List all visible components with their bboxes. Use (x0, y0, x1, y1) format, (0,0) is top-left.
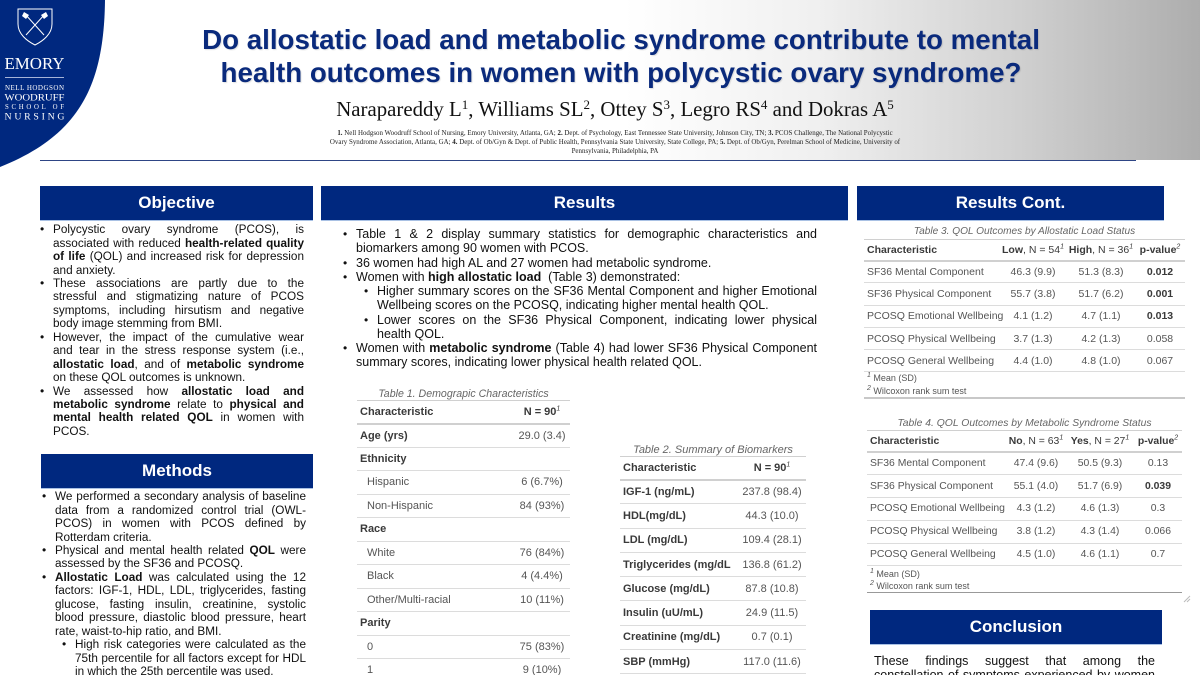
table 4 body: SF36 Physical Component (870, 481, 993, 492)
heading: Results (321, 186, 848, 221)
text: objective bullets: These associations are partly due to the (53, 277, 304, 290)
table 2 body: 136.8 (61.2) (742, 559, 802, 571)
table 2 body: 237.8 (98.4) (742, 486, 802, 498)
table 3 footnotes: 2 Wilcoxon rank sum test (867, 385, 966, 396)
table 2 body: Creatinine (mg/dL) (623, 631, 720, 643)
table 3 footnotes (867, 372, 966, 396)
heading: Objective: Objective (138, 193, 215, 212)
table 4 body: 50.5 (9.3) (1078, 458, 1122, 469)
table 4 body: No, N = 631 (1009, 434, 1063, 446)
table 4 body: 4.6 (1.3) (1081, 503, 1119, 514)
table 4 body (867, 430, 1182, 566)
table 2 body: Glucose (mg/dL) (623, 583, 710, 595)
text: methods bullets: factors: IGF-1, HDL, LDL, triglycerides, fasting (55, 584, 306, 597)
text: results bullets: Table 1 & 2 display summary statistics for demographic characteristics and (356, 227, 817, 241)
table 2 body: Triglycerides (mg/dL (623, 559, 731, 571)
table 4 body: 4.3 (1.4) (1081, 526, 1119, 537)
table 1 body: Age (yrs) (360, 430, 408, 442)
table 1 body: Hispanic (367, 476, 409, 488)
table 3 body: PCOSQ Emotional Wellbeing (867, 310, 1003, 322)
text: objective bullets: associated with reduced health-related quality (53, 237, 304, 250)
header rule (40, 160, 1136, 161)
table 1 body: 6 (6.7%) (521, 476, 563, 488)
table 2 body: SBP (mmHg) (623, 656, 690, 668)
text: results bullets: Women with high allostatic load (Table 3) demonstrated: (356, 270, 680, 284)
table 3 body: Low, N = 541 (1002, 243, 1064, 256)
text: results bullets: 36 women had high AL and 27 women had metabolic syndrome. (356, 256, 711, 270)
text: methods bullets (42, 490, 306, 675)
table 4 body: 0.7 (1151, 549, 1165, 560)
heading: Methods: Methods (142, 461, 212, 480)
table 3 body: 0.058 (1147, 333, 1173, 345)
table 4 body: 0.039 (1145, 481, 1171, 492)
table 1 body: 75 (83%) (520, 641, 564, 653)
table 2 body: N = 901 (754, 461, 790, 474)
table 4 footnotes: 1 Mean (SD) (870, 568, 920, 579)
table 3 body: 4.2 (1.3) (1081, 333, 1121, 345)
table 3 body: 3.7 (1.3) (1013, 333, 1053, 345)
table 3 body: 0.012 (1147, 266, 1173, 278)
table 3 body: 51.7 (6.2) (1079, 288, 1123, 300)
table 2 body: LDL (mg/dL) (623, 534, 688, 546)
text: conclusion (874, 654, 1155, 675)
affiliations (330, 128, 900, 155)
table 3 body: PCOSQ Physical Wellbeing (867, 333, 996, 345)
table 2 body (620, 456, 806, 674)
text: objective bullets: Polycystic ovary syndrome (PCOS), is (53, 223, 304, 236)
text: methods bullets: Physical and mental health related QOL were (55, 544, 306, 557)
table 3 body: 0.001 (1147, 288, 1173, 300)
table 4 body: 47.4 (9.6) (1014, 458, 1058, 469)
text: results bullets: health QOL. (377, 327, 444, 341)
resize handle (1184, 596, 1190, 602)
table 3 body: 46.3 (9.9) (1011, 266, 1055, 278)
table 3 body: 51.3 (8.3) (1079, 266, 1123, 278)
table 4 body: 4.5 (1.0) (1017, 549, 1055, 560)
table 3 body: 55.7 (3.8) (1011, 288, 1055, 300)
table 2 body: 109.4 (28.1) (742, 534, 802, 546)
heading: Results Cont. (857, 186, 1164, 221)
affiliations: Pennsylvania, Philadelphia, PA (572, 147, 658, 155)
table 1 body: 84 (93%) (520, 500, 564, 512)
table 3 body: 4.8 (1.0) (1081, 355, 1121, 367)
text: methods bullets: 75th percentile for all factors except for HDL (75, 652, 306, 665)
title: Do allostatic load and metabolic syndrome contribute to mental (202, 24, 1040, 55)
table 4: QOL outcomes by metabolic syndrome (867, 418, 1182, 593)
table 3 footnotes: 1 Mean (SD) (867, 372, 917, 383)
table 4 body: SF36 Mental Component (870, 458, 986, 469)
table 3 body: SF36 Mental Component (867, 266, 984, 278)
table 1 body: Black (367, 570, 394, 582)
header gradient band (0, 0, 1200, 160)
table 2 body: Insulin (uU/mL) (623, 607, 703, 619)
table 1 body: 10 (11%) (520, 594, 564, 606)
text: results bullets: biomarkers among 90 women with PCOS. (356, 241, 589, 255)
text: objective bullets: metabolic syndrome relate to physical and (53, 398, 304, 411)
table 3: QOL outcomes by allostatic load (864, 226, 1185, 399)
table 4 body: 4.3 (1.2) (1017, 503, 1055, 514)
table 2 body: 24.9 (11.5) (746, 607, 798, 619)
table 4 body: 55.1 (4.0) (1014, 481, 1058, 492)
text: methods bullets: Rotterdam criteria. (55, 531, 152, 544)
text: results bullets: Lower scores on the SF36 Physical Component, indicating lower physical (377, 313, 817, 327)
logo: Emory Nell Hodgson Woodruff School of Nursing: NELL HODGSON (5, 84, 64, 92)
table 1 body: 29.0 (3.4) (518, 430, 566, 442)
table 4 body: 4.6 (1.1) (1081, 549, 1119, 560)
heading: Results Cont.: Results Cont. (956, 193, 1065, 212)
table 2 body: IGF-1 (ng/mL) (623, 486, 694, 498)
text: objective bullets: allostatic load, and of metabolic syndrome (53, 358, 304, 371)
title (202, 24, 1040, 89)
text: methods bullets: blood pressure, diastolic blood pressure, heart (55, 611, 306, 624)
text: objective bullets: PCOS. (53, 425, 90, 438)
text: results bullets (344, 227, 817, 369)
heading: Methods (41, 454, 313, 489)
table 1 body: Race (360, 523, 386, 535)
table 3 body: 0.067 (1147, 355, 1173, 367)
table 4 body: p-value2 (1138, 434, 1178, 446)
text: results bullets: summary scores, indicating lower physical health related QOL. (356, 355, 702, 369)
affiliations: Ovary Syndrome Association, Atlanta, GA; 4. Dept. of Ob/Gyn & Dept. of Public Health, Pennsylvania State University, State College, PA; 5. Dept. of Ob/Gyn, Perelman School of Medicine, University of (330, 138, 900, 146)
table 2 body: Characteristic (623, 462, 696, 474)
table 3 body: 4.4 (1.0) (1013, 355, 1053, 367)
text: methods bullets: rate, waist-to-hip ratio, and BMI. (55, 625, 222, 638)
table 4 body: Characteristic (870, 436, 939, 446)
table 2 body: 0.7 (0.1) (752, 631, 792, 643)
table 1: demographic characteristics (357, 388, 570, 675)
table 4 caption: Table 4. QOL Outcomes by Metabolic Syndrome Status (897, 418, 1152, 429)
text: methods bullets: glucose, fasting insulin, creatinine, systolic (55, 598, 306, 611)
heading: Conclusion: Conclusion (970, 617, 1062, 636)
logo: Emory Nell Hodgson Woodruff School of Nursing: SCHOOL OF (5, 104, 64, 111)
table 2 body: 87.8 (10.8) (745, 583, 799, 595)
text: objective bullets: on these QOL outcomes is unknown. (53, 371, 245, 384)
table 1 body (357, 400, 570, 675)
text: methods bullets: PCOS) in women with PCOS defined by (55, 517, 306, 530)
text: objective bullets: and anxiety. (53, 264, 116, 277)
text: methods bullets: Allostatic Load was calculated using the 12 (55, 571, 306, 584)
logo: Emory Nell Hodgson Woodruff School of Nursing: WOODRUFF (4, 94, 64, 104)
table 4 body: PCOSQ General Wellbeing (870, 549, 996, 560)
text: objective bullets (40, 223, 304, 438)
table 2 caption: Table 2. Summary of Biomarkers (633, 444, 793, 456)
title: health outcomes in women with polycystic ovary syndrome? (221, 57, 1021, 88)
text: results bullets: Higher summary scores on the SF36 Mental Component and higher Emotional (377, 284, 817, 298)
table 1 body: Non-Hispanic (367, 500, 433, 512)
text: methods bullets: High risk categories were calculated as the (75, 638, 306, 651)
table 4 body: Yes, N = 271 (1071, 434, 1129, 446)
heading: Conclusion (870, 610, 1162, 645)
table 1 body: Ethnicity (360, 453, 406, 465)
table 4 footnotes: 2 Wilcoxon rank sum test (870, 580, 969, 591)
table 2 body: 44.3 (10.0) (745, 510, 799, 522)
text: objective bullets: mental health related QOL in women with (53, 411, 304, 424)
text: methods bullets: We performed a secondary analysis of baseline (55, 490, 306, 503)
table 3 caption: Table 3. QOL Outcomes by Allostatic Load Status (914, 226, 1135, 237)
table 1 caption: Table 1. Demograpic Characteristics (378, 388, 549, 400)
table 3 body (864, 239, 1185, 372)
text: methods bullets: assessed by the SF36 and PCOSQ. (55, 557, 243, 570)
table 1 body: 4 (4.4%) (521, 570, 563, 582)
table 4 body: 0.066 (1145, 526, 1171, 537)
text: objective bullets: However, the impact of the cumulative wear (53, 331, 304, 344)
table 3 body: Characteristic (867, 244, 937, 256)
table 1 body: Parity (360, 617, 391, 629)
heading: Objective (40, 186, 313, 221)
text: results bullets: Women with metabolic syndrome (Table 4) had lower SF36 Physical Component (356, 341, 817, 355)
table 4 body: 0.3 (1151, 503, 1165, 514)
affiliations: 1. Nell Hodgson Woodruff School of Nursing, Emory University, Atlanta, GA; 2. Dept. of Psychology, East Tennessee State University, Johnson City, TN; 3. PCOS Challenge, The National Polycystic (337, 128, 893, 136)
logo: Emory Nell Hodgson Woodruff School of Nursing: EMORY (4, 54, 64, 73)
authors: Narapareddy L1, Williams SL2, Ottey S3, Legro RS4 and Dokras A5 (336, 97, 894, 121)
table 3 body: p-value2 (1140, 243, 1180, 256)
text: objective bullets: symptoms, including hirsutism and negative (53, 304, 304, 317)
text: conclusion: These findings suggest that among the (874, 654, 1155, 668)
table 4 body: 51.7 (6.9) (1078, 481, 1122, 492)
table 1 body: Other/Multi-racial (367, 594, 451, 606)
text: objective bullets: of life (QOL) and increased risk for depression (53, 250, 304, 263)
table 1 body: White (367, 547, 395, 559)
table 2 body: HDL(mg/dL) (623, 510, 686, 522)
text: methods bullets: data from a randomized control trial (OWL- (55, 504, 306, 517)
text: objective bullets: and tear in the stress response system (i.e., (53, 344, 304, 357)
text: results bullets: Wellbeing scores on the PCOSQ, indicating higher mental health QOL. (377, 298, 769, 312)
table 1 body: Characteristic (360, 406, 433, 418)
table 3 body: SF36 Physical Component (867, 288, 991, 300)
logo: Emory Nell Hodgson Woodruff School of Nursing: NURSING (4, 112, 64, 122)
table 4 body: PCOSQ Physical Wellbeing (870, 526, 997, 537)
table 2: summary of biomarkers (620, 444, 806, 674)
table 3 body: PCOSQ General Wellbeing (867, 355, 994, 367)
text: objective bullets: stressful and stigmatizing nature of PCOS (53, 290, 304, 303)
table 3 body: 4.7 (1.1) (1081, 310, 1121, 322)
text: objective bullets: body image stemming from BMI. (53, 317, 222, 330)
table 3 body: High, N = 361 (1069, 243, 1133, 256)
table 4 body: 3.8 (1.2) (1017, 526, 1055, 537)
table 3 body: 0.013 (1147, 310, 1173, 322)
table 1 body: N = 901 (524, 405, 560, 418)
table 4 body: 0.13 (1148, 458, 1168, 469)
logo: Emory Nell Hodgson Woodruff School of Nursing (0, 0, 105, 167)
table 2 body: 117.0 (11.6) (743, 656, 801, 668)
table 3 body: 4.1 (1.2) (1013, 310, 1053, 322)
text: objective bullets: We assessed how allostatic load and (53, 385, 304, 398)
table 4 footnotes (870, 568, 970, 591)
table 4 body: PCOSQ Emotional Wellbeing (870, 503, 1005, 514)
icon: shield with crossed torches (18, 9, 52, 45)
table 1 body: 76 (84%) (520, 547, 564, 559)
heading: Results: Results (554, 193, 615, 212)
table 1 body: 0 (367, 641, 373, 653)
